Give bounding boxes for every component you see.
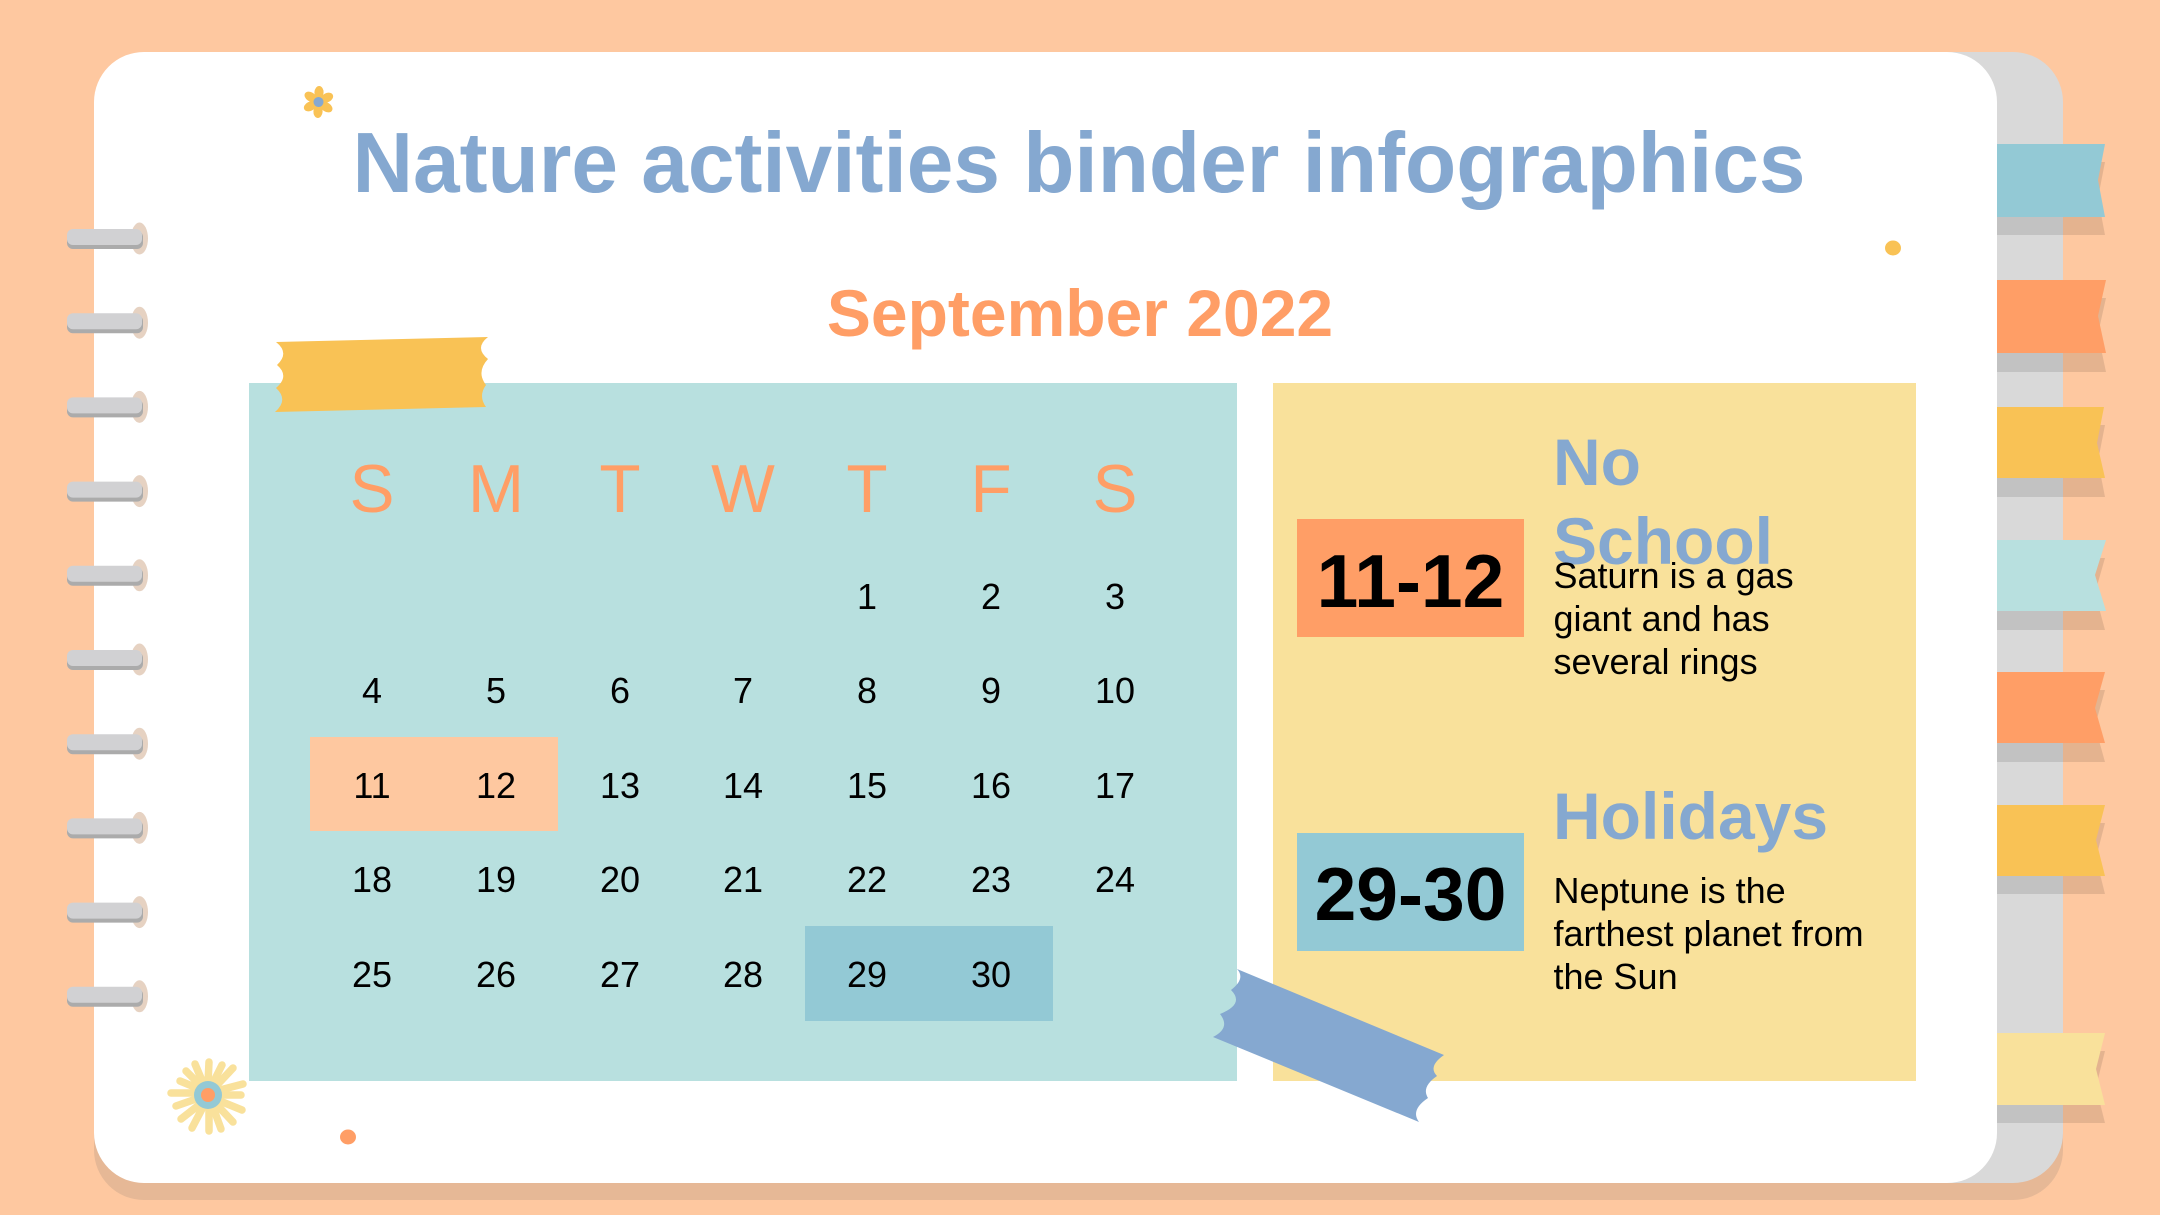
decorative yellow dot	[1885, 240, 1901, 256]
calendar dates: 16	[971, 765, 1011, 806]
description: Saturn: several rings	[1554, 641, 1758, 682]
calendar dates: 1	[857, 576, 877, 617]
calendar dates: 8	[857, 670, 877, 711]
calendar dates: 11	[353, 765, 391, 806]
weekday headers: T	[599, 452, 641, 527]
binder back page	[1800, 52, 2063, 1183]
calendar dates: 23	[971, 859, 1011, 900]
calendar dates: 9	[981, 670, 1001, 711]
calendar dates: 25	[352, 954, 392, 995]
heading: No School: No	[1553, 425, 1641, 499]
decorative orange dot	[340, 1130, 356, 1144]
calendar dates: 30	[971, 954, 1011, 995]
calendar dates: 18	[352, 859, 392, 900]
washi tape: yellow	[275, 337, 488, 412]
date badge: 29-30	[1297, 833, 1524, 951]
weekday headers: M	[468, 452, 524, 527]
calendar dates: 22	[847, 859, 887, 900]
binder index tabs	[1997, 144, 2106, 1123]
calendar dates: 17	[1095, 765, 1135, 806]
calendar dates: 5	[486, 670, 506, 711]
calendar dates: 19	[476, 859, 516, 900]
calendar dates: 28	[723, 954, 763, 995]
calendar dates: 24	[1095, 859, 1135, 900]
calendar dates	[352, 576, 1135, 995]
calendar dates: 2	[981, 576, 1001, 617]
panel: calendar	[249, 383, 1237, 1081]
title: Nature activities binder infographics	[352, 116, 1806, 211]
description: Saturn: giant and has	[1554, 598, 1770, 639]
highlight: 11-12 no school	[310, 737, 558, 831]
date badge: 29-30: 29-30	[1315, 852, 1506, 936]
calendar dates: 7	[733, 670, 753, 711]
heading: Holidays: Holidays	[1553, 779, 1828, 853]
spiral binder rings	[67, 222, 148, 1012]
description: Saturn: Saturn is a gas	[1554, 555, 1794, 596]
date badge: 11-12	[1297, 519, 1524, 637]
icon: small yellow flower	[302, 85, 335, 119]
calendar dates: 6	[610, 670, 630, 711]
heading: No School: School	[1553, 504, 1773, 578]
calendar dates: 26	[476, 954, 516, 995]
panel: events	[1273, 383, 1916, 1081]
calendar dates: 29	[847, 954, 887, 995]
calendar dates: 27	[600, 954, 640, 995]
weekday headers: T	[846, 452, 888, 527]
weekday headers: W	[711, 452, 775, 527]
description: Neptune: farthest planet from	[1554, 913, 1864, 954]
calendar dates: 14	[723, 765, 763, 806]
calendar dates: 21	[723, 859, 763, 900]
icon: sunburst flower	[171, 1062, 243, 1131]
calendar dates: 10	[1095, 670, 1135, 711]
calendar dates: 13	[600, 765, 640, 806]
weekday headers: S	[1092, 452, 1138, 527]
month heading: September 2022	[827, 276, 1333, 350]
washi tape: blue	[1213, 969, 1444, 1122]
weekday headers: F	[970, 452, 1012, 527]
calendar dates: 12	[476, 765, 516, 806]
description: Neptune: Neptune is the	[1554, 870, 1786, 911]
weekday headers: S	[349, 452, 395, 527]
calendar dates: 4	[362, 670, 382, 711]
weekday headers	[349, 452, 1138, 527]
description: Neptune: the Sun	[1554, 956, 1678, 997]
date badge: 11-12: 11-12	[1317, 539, 1504, 623]
calendar dates: 15	[847, 765, 887, 806]
calendar dates: 20	[600, 859, 640, 900]
highlight: 29-30 holidays	[805, 926, 1053, 1021]
calendar dates: 3	[1105, 576, 1125, 617]
